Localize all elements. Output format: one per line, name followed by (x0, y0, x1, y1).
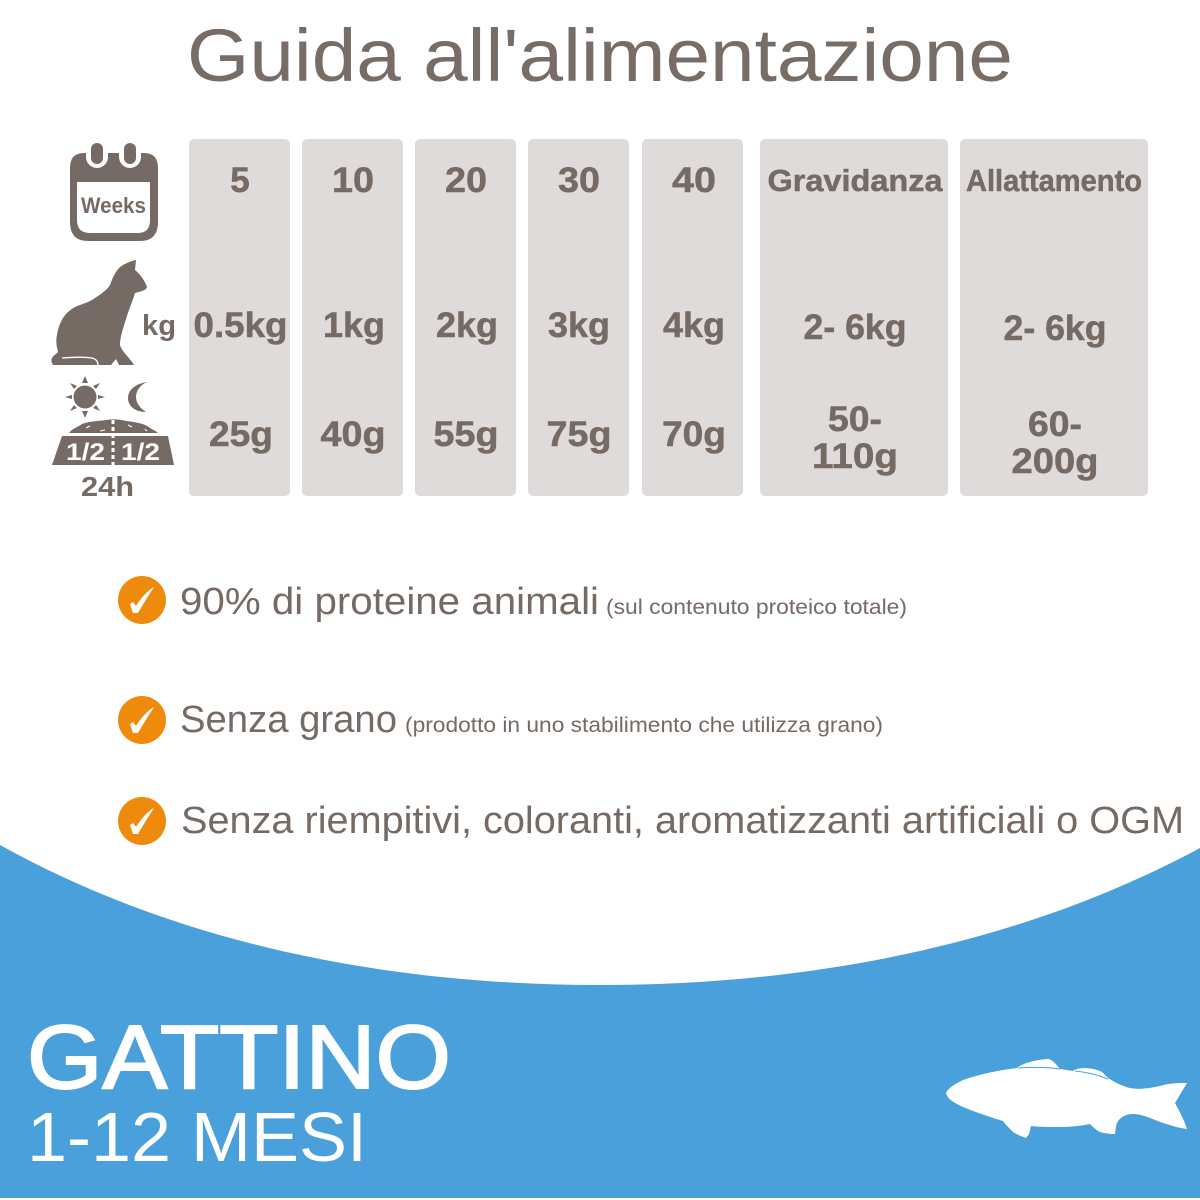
icon: calendar weeks: Weeks (81, 193, 146, 218)
icon: food bowl half and half: 1/2 (66, 439, 105, 466)
column: allattamento (960, 139, 1148, 496)
column: 20 weeks (415, 139, 516, 496)
column: gravidanza: 110g (812, 437, 898, 476)
blue curved footer (0, 845, 1200, 1198)
icon: calendar weeks (70, 140, 158, 241)
column: allattamento: 2- 6kg (1004, 309, 1106, 348)
column: 40 weeks (642, 139, 743, 496)
icon: check (118, 797, 166, 845)
column: gravidanza: 2- 6kg (804, 308, 906, 347)
column: gravidanza: 50- (828, 400, 882, 439)
column: allattamento: 60- (1028, 405, 1082, 444)
column: 10 weeks: 40g (320, 415, 386, 454)
icon: sun (65, 376, 105, 418)
benefit: proteine animali (118, 576, 907, 624)
column: 30 weeks: 3kg (548, 306, 610, 345)
column: 20 weeks: 20 (445, 161, 487, 200)
column: 20 weeks: 55g (434, 415, 498, 454)
column: 5 weeks (189, 139, 290, 496)
icon: fish (946, 1059, 1187, 1138)
title: Guida all'alimentazione (187, 14, 1013, 97)
column: 10 weeks (302, 139, 403, 496)
icon: check (118, 696, 166, 744)
icon: moon (128, 382, 147, 412)
column: 20 weeks: 2kg (436, 306, 498, 345)
column: 40 weeks: 70g (662, 415, 726, 454)
benefit: proteine animali: (sul contenuto proteico totale) (606, 596, 907, 619)
heading: gattino: GATTINO (27, 1008, 451, 1108)
column: 40 weeks: 4kg (663, 306, 725, 345)
benefit: senza grano (118, 696, 883, 744)
column: 5 weeks: 5 (230, 161, 250, 200)
benefit: proteine animali: 90% di proteine animali (180, 581, 599, 623)
column: gravidanza (760, 139, 948, 496)
column: 5 weeks: 0.5kg (194, 306, 288, 345)
label: kg: kg (142, 310, 176, 342)
subheading: age range: 1-12 MESI (27, 1098, 367, 1176)
column: allattamento: 200g (1012, 442, 1098, 481)
column: 30 weeks (528, 139, 629, 496)
column: 30 weeks: 75g (546, 415, 612, 454)
icon: food bowl half and half: 1/2 (121, 439, 160, 466)
column: 10 weeks: 10 (332, 161, 374, 200)
benefit: senza riempitivi: Senza riempitivi, coloranti, aromatizzanti artificiali o OGM (181, 800, 1184, 842)
column: 30 weeks: 30 (558, 161, 600, 200)
icon: sitting cat (51, 260, 147, 365)
label: 24h: 24h (81, 471, 134, 502)
column: 10 weeks: 1kg (323, 306, 385, 345)
column: allattamento: Allattamento (966, 163, 1142, 198)
column: gravidanza: Gravidanza (768, 163, 943, 198)
icon: food bowl half and half (52, 419, 174, 466)
icon: check (118, 576, 166, 624)
column: 40 weeks: 40 (672, 161, 716, 200)
feeding table (189, 139, 1148, 496)
benefit: senza grano: (prodotto in uno stabilimento che utilizza grano) (405, 714, 883, 737)
benefit: senza grano: Senza grano (180, 699, 397, 741)
column: 5 weeks: 25g (209, 415, 273, 454)
